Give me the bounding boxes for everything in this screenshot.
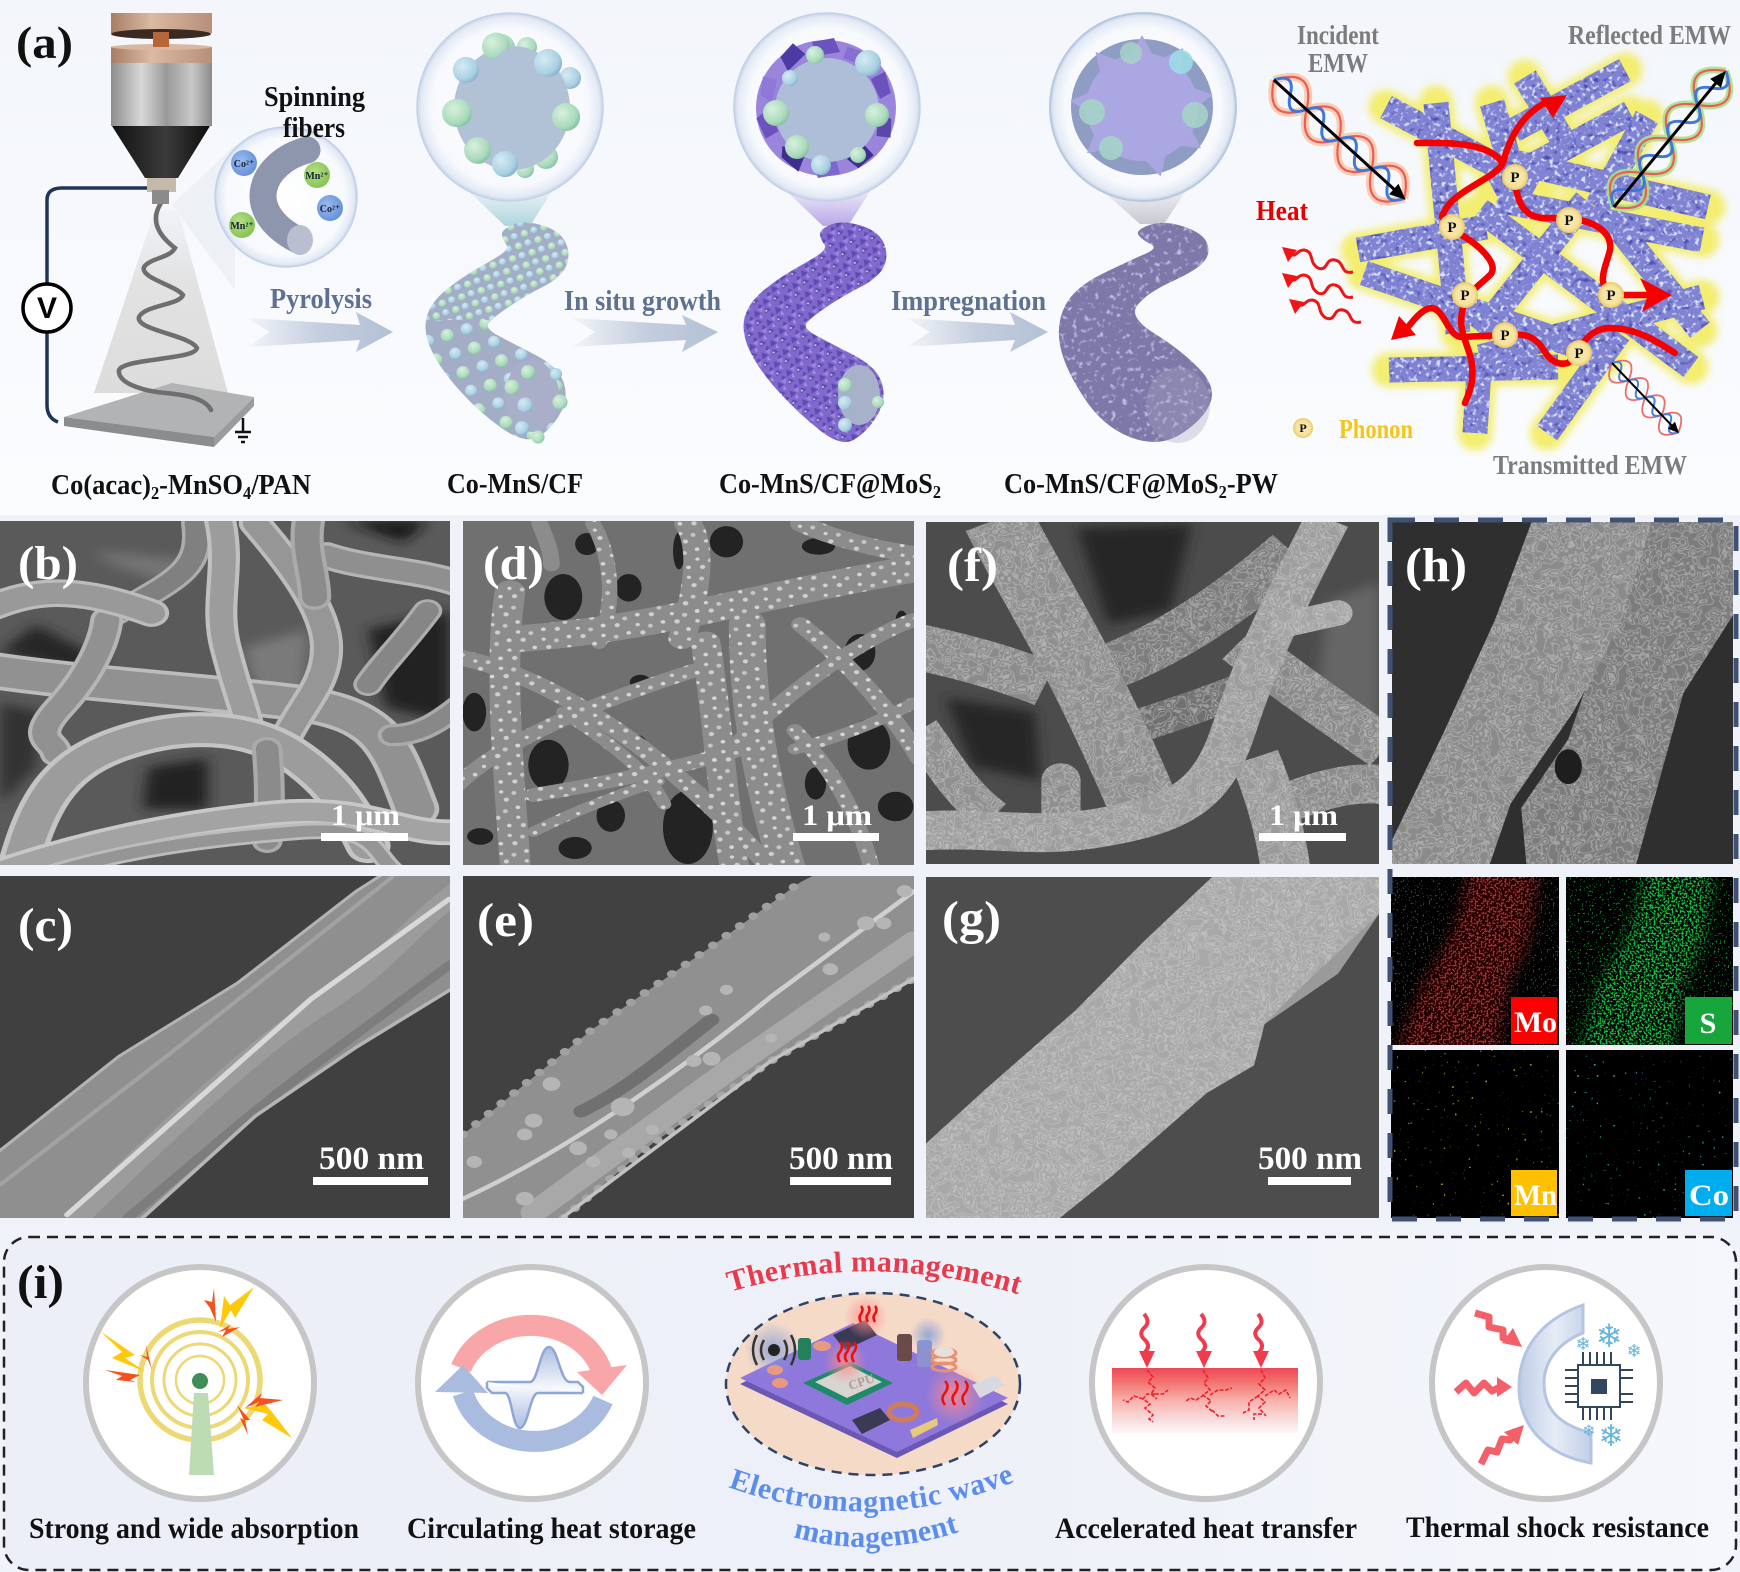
property captions: Strong and wide absorption [29,1512,359,1545]
arrow: pyrolysis: Pyrolysis [270,283,372,315]
EDS map: Mo: Mo [1514,1006,1557,1039]
snowflakes: ❄ [1598,1419,1624,1454]
panel a: preparation and mechanism [0,0,1740,515]
EMW labels: Incident [1297,20,1379,50]
phonon markers: P [1564,213,1574,229]
textured fibers [1358,70,1708,433]
panel d: SEM decorated fibers [456,521,925,873]
spinning fibers label [264,81,365,144]
phonon markers: P [1500,328,1510,344]
step captions: Co-MnS/CF@MoS [1004,468,1240,500]
arrow: impregnation [891,285,1048,352]
arrow: pyrolysis [247,283,393,352]
spinning fibers bubble: Co²⁺ [234,159,254,170]
chip [1565,1352,1633,1420]
EMW labels [1297,20,1731,480]
EDS map: S [1566,857,1733,1067]
panel h: SEM for elemental mapping [1392,522,1733,864]
SEM panels backdrop [0,515,1740,1225]
scale bar e: 500 nm [789,1141,893,1177]
yellow glow [1358,70,1708,433]
scale bar b [321,799,408,841]
Co-MnS/CF@MoS2-PW fiber and bubble [1050,13,1236,443]
heading: electromagnetic wave management: Electromagnetic wave [728,1468,1014,1518]
transmitted EMW wave [1603,354,1688,442]
panel e: SEM decorated single fiber [463,876,914,1218]
panel i: properties [2,1236,1738,1572]
step captions: Co(acac) [51,469,161,501]
phonon markers: P [1447,220,1457,236]
snowflakes: ❄ [1575,1334,1591,1355]
Co-MnS/CF fiber and bubble [415,13,603,445]
heat arrowheads [1282,247,1304,314]
panel f: SEM MoS2 covered fibers [920,519,1385,872]
snowflakes: ❄ [1596,1317,1622,1355]
icon: strong and wide absorption [86,1267,314,1499]
icon: accelerated heat transfer [1092,1267,1320,1499]
EDS map: Mo [1391,857,1559,1067]
phonon markers: P [1460,288,1470,304]
icon: thermal shock resistance [1432,1267,1660,1499]
label f: (f) [947,539,998,592]
EDS map: Mn [1391,1050,1559,1218]
spinning fibers bubble: Co²⁺ [320,204,340,215]
step captions: Co-MnS/CF [447,468,583,500]
panel c: SEM single fiber [0,876,457,1218]
step captions: 2 [933,482,941,502]
step captions: 2 [151,483,159,503]
center: circuit board illustration: CPU [846,1370,877,1393]
snowflakes: ❄ [1626,1341,1642,1362]
step captions: 2 [1219,482,1227,502]
label i: (i) [17,1256,64,1309]
heat label: Heat [1256,195,1308,227]
panel g: SEM MoS2 single fiber [926,877,1379,1218]
spinning fibers bubble: Mn²⁺ [305,171,329,182]
arrow: in situ growth [564,285,721,352]
spinning fibers bubble: Mn²⁺ [230,221,254,232]
panel b: SEM fibers [0,519,457,878]
heading: electromagnetic wave management [728,1468,1014,1554]
step captions: Co-MnS/CF@MoS [719,468,955,500]
electrospinning setup [23,13,254,447]
label e: (e) [477,894,534,947]
EDS map: Mn: Mn [1514,1179,1557,1212]
network fiber absorber [1358,70,1708,433]
red arrowheads [1391,95,1672,340]
EMW labels: Transmitted EMW [1493,450,1687,480]
heat wave arrows [1290,250,1361,322]
phonon legend [1293,414,1413,444]
scale bar d [793,799,879,841]
EDS map: Co [1566,1050,1733,1218]
scale bar f: 1 μm [1269,799,1338,832]
EDS map: Co: Co [1689,1179,1729,1212]
voltage source: V [37,292,57,325]
center: circuit board illustration [726,1293,1020,1475]
label g: (g) [942,892,1001,945]
scale bar g: 500 nm [1258,1141,1362,1177]
dashed frame around h and EDS maps [1390,520,1736,1219]
scale bar f [1259,799,1346,841]
spinning fibers label: fibers [283,112,345,144]
property captions: Circulating heat storage [407,1512,696,1545]
red phonon heat paths [1404,100,1675,403]
spinning fibers bubble [172,127,357,290]
scale bar c: 500 nm [319,1141,424,1177]
EDS map: S: S [1700,1007,1716,1040]
ground symbol [235,418,251,442]
reflected EMW wave [1599,59,1740,219]
Co-MnS/CF@MoS2 fiber and bubble [734,13,920,442]
label d: (d) [483,537,544,590]
incident EMW wave [1261,66,1418,214]
step captions: -MnSO [159,469,243,501]
step captions: 4 [243,483,251,503]
label h: (h) [1405,539,1467,592]
spinning fibers label: Spinning [264,81,365,113]
label a: (a) [16,17,73,68]
scale bar d: 1 μm [802,799,872,832]
heading: thermal management: Thermal management [725,1252,1022,1294]
step captions: -PW [1227,468,1278,500]
scale bar b: 1 μm [331,799,400,832]
snowflakes [1575,1317,1642,1454]
arrow: in situ growth: In situ growth [564,285,721,317]
step captions: /PAN [250,469,311,501]
phonon markers: P [1510,170,1520,186]
property captions: Accelerated heat transfer [1055,1512,1357,1545]
phonon markers [1439,164,1624,366]
property captions: Thermal shock resistance [1406,1511,1709,1544]
EMW labels: EMW [1308,48,1368,78]
property captions [29,1511,1709,1545]
snowflakes: ❄ [1582,1421,1596,1440]
label b: (b) [18,537,78,590]
phonon markers: P [1606,288,1616,304]
heading: electromagnetic wave management: management [794,1516,959,1554]
voltage source [23,284,71,332]
phonon legend: P [1299,421,1307,435]
phonon markers: P [1574,346,1584,362]
arrow: impregnation: Impregnation [891,285,1046,317]
phonon legend: Phonon [1339,414,1413,444]
step captions [51,468,1278,503]
label c: (c) [18,899,73,952]
icon: circulating heat storage [418,1267,646,1499]
